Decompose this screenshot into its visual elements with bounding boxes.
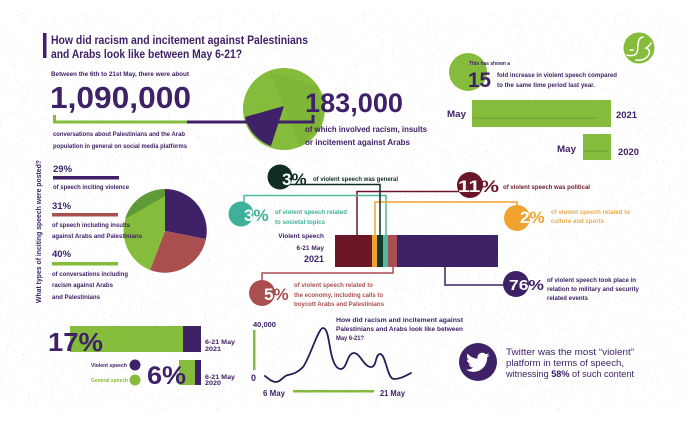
title — [43, 33, 308, 61]
legend: types of inciting speech: 31% — [52, 201, 72, 212]
bar: violent versus general speech 2021: 6-21 May — [205, 339, 235, 346]
callout: societal topics 3%: to societal topics — [275, 219, 325, 226]
callout: culture and sports 2% — [504, 205, 630, 231]
icon: twitter bird — [459, 343, 497, 381]
text block: twitter finding: Twitter was the most “violent” — [506, 347, 634, 357]
bar: May 2020 — [557, 134, 639, 160]
text block: twitter finding: witnessing 58% of such content — [505, 369, 635, 379]
bar: May 2021: May — [447, 109, 467, 120]
label: stacked bar: 6-21 May — [297, 245, 324, 252]
panel: total conversations: conversations about Palestinians and the Arab — [53, 132, 185, 138]
callout: societal topics 3% — [228, 202, 347, 226]
line chart: conversations over time: 6 May — [263, 389, 286, 398]
panel: total conversations: Between the 6th to 21st May, there were about — [51, 71, 190, 78]
bar: violent versus general speech 2021 — [48, 326, 235, 357]
pie chart: types of inciting speech — [124, 189, 207, 273]
callout: military and security 76%: of violent speech took place in — [547, 277, 636, 284]
text block: twitter finding — [505, 347, 635, 379]
callout: political 11%: of violent speech was political — [503, 184, 590, 191]
line chart: conversations over time — [251, 320, 411, 398]
legend: violent and general speech — [91, 360, 140, 386]
legend: types of inciting speech: and Palestinians — [52, 295, 101, 301]
text block: line chart heading: Palestinians and Arabs look like between — [336, 327, 463, 333]
panel: 183,000 racist conversations: or incitement against Arabs — [305, 138, 411, 147]
legend: types of inciting speech: racism against Arabs — [52, 283, 114, 289]
panel: total conversations — [50, 71, 313, 150]
vertical axis heading: types of inciting speech: What types of inciting speech were posted? — [36, 160, 43, 303]
bar: violent versus general speech 2020: 6-21 May — [205, 374, 235, 381]
title: How did racism and incitement against Palestinians — [51, 35, 308, 47]
callout: economy 5%: the economy, including calls to — [294, 292, 383, 299]
text block: line chart heading: How did racism and incitement against — [336, 318, 463, 324]
bar: violent versus general speech 2021: 17% — [48, 327, 103, 357]
panel: fifteen fold increase: to the same time period last year. — [497, 82, 595, 89]
callout: culture and sports 2%: of violent speech related to — [551, 209, 630, 216]
panel: total conversations: population in general on social media platforms — [53, 144, 188, 150]
callout: general 3%: of violent speech was general — [313, 176, 398, 183]
bar: May 2021: 2021 — [616, 110, 637, 120]
callout: general 3% — [268, 164, 398, 190]
stacked bar: violent speech topics — [335, 235, 498, 267]
text block: twitter finding: platform in terms of speech, — [506, 358, 624, 368]
connector lines — [244, 184, 517, 285]
callout: military and security 76%: relation to military and security — [547, 286, 639, 293]
callout: economy 5%: of violent speech related to — [294, 282, 373, 289]
bar: May 2020: 2020 — [618, 147, 639, 157]
line chart: conversations over time: 0 — [251, 373, 256, 383]
panel: fifteen fold increase — [449, 53, 617, 92]
panel: 183,000 racist conversations: 183,000 — [305, 88, 403, 118]
legend: types of inciting speech — [52, 164, 143, 301]
title: and Arabs look like between May 6-21? — [51, 49, 242, 61]
label: stacked bar: 2021 — [304, 254, 324, 264]
bar: May 2021 — [447, 100, 637, 127]
legend: types of inciting speech: of speech inciting violence — [53, 185, 130, 191]
bar: violent versus general speech 2020: 2020 — [205, 380, 221, 387]
line chart: conversations over time: 21 May — [380, 389, 406, 398]
icon: logo — [624, 32, 654, 64]
text block: line chart heading — [336, 318, 463, 342]
legend: types of inciting speech: 40% — [52, 249, 72, 260]
label: stacked bar: Violent speech — [278, 233, 324, 240]
legend: types of inciting speech: of conversations including — [52, 272, 128, 278]
callout: economy 5%: 5% — [264, 285, 289, 304]
pie chart: share of conversations with racism — [243, 68, 325, 150]
legend: types of inciting speech: 29% — [53, 164, 73, 175]
panel: total conversations: 1,090,000 — [50, 80, 191, 115]
panel: fifteen fold increase: fold increase in violent speech compared — [497, 72, 617, 79]
callout: political 11%: 11 % — [458, 177, 499, 196]
callout: culture and sports 2%: 2% — [520, 208, 545, 227]
callout: societal topics 3%: 3% — [244, 206, 269, 225]
callout: societal topics 3%: of violent speech related — [275, 209, 347, 216]
text block: line chart heading: May 6-21? — [336, 336, 364, 342]
callout: culture and sports 2%: culture and sports — [551, 218, 604, 225]
line chart: conversations over time: 40,000 — [253, 320, 276, 329]
legend: violent and general speech: Violent speech — [91, 363, 128, 369]
bar: violent versus general speech 2021: 2021 — [205, 346, 221, 353]
bar: violent versus general speech 2020 — [147, 360, 235, 390]
panel: fifteen fold increase: This has shown a — [469, 61, 511, 67]
callout: political 11% — [457, 172, 590, 198]
legend: types of inciting speech: against Arabs and Palestinians — [52, 234, 143, 240]
callout: economy 5% — [249, 280, 384, 308]
bar: violent versus general speech 2020: 6% — [147, 362, 186, 390]
bar: May 2020: May — [557, 144, 577, 155]
callout: military and security 76%: related events — [547, 295, 588, 302]
callout: general 3%: 3% — [282, 170, 307, 189]
legend: violent and general speech: General speech — [91, 378, 129, 384]
callout: economy 5%: boycott Arabs and Palestinians — [294, 301, 384, 308]
legend: types of inciting speech: of speech including insults — [52, 223, 131, 229]
callout: military and security 76%: 76% — [509, 277, 544, 294]
panel: 183,000 racist conversations — [305, 88, 428, 147]
label: stacked bar — [278, 233, 324, 264]
callout: military and security 76% — [503, 271, 639, 302]
panel: 183,000 racist conversations: of which involved racism, insults — [305, 125, 428, 134]
panel: fifteen fold increase: 15 — [468, 69, 491, 92]
